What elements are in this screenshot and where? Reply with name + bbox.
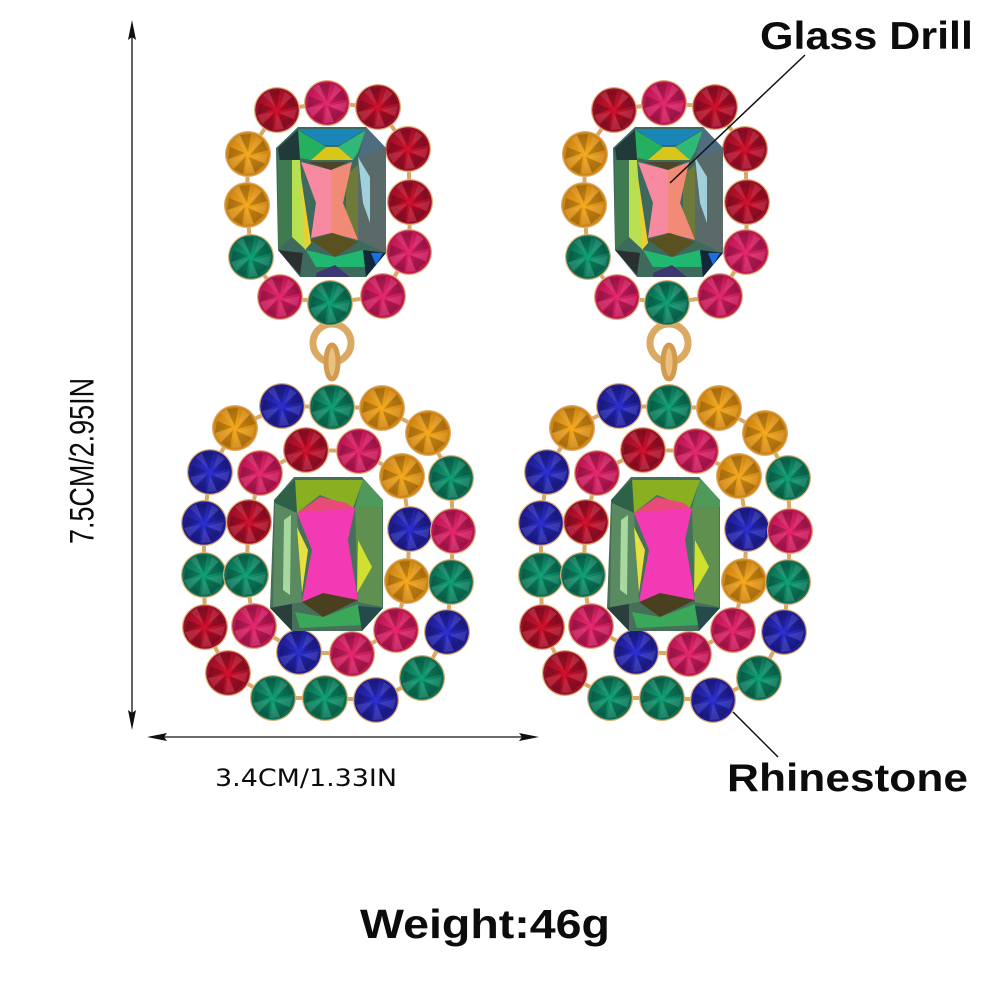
width label: 3.4CM/1.33IN bbox=[215, 764, 397, 792]
callout: glass drill bbox=[670, 15, 973, 183]
callout: rhinestone bbox=[727, 712, 968, 800]
horizontal dimension arrow bbox=[147, 733, 539, 741]
callout: glass drill: Glass Drill bbox=[760, 15, 973, 58]
vertical dimension arrow bbox=[128, 20, 136, 730]
callout: rhinestone: Rhinestone bbox=[727, 757, 968, 800]
weight label: Weight:46g bbox=[360, 901, 610, 947]
height label: 7.5CM/2.95IN bbox=[64, 378, 102, 544]
left earring bbox=[181, 80, 476, 723]
right earring bbox=[518, 80, 813, 723]
